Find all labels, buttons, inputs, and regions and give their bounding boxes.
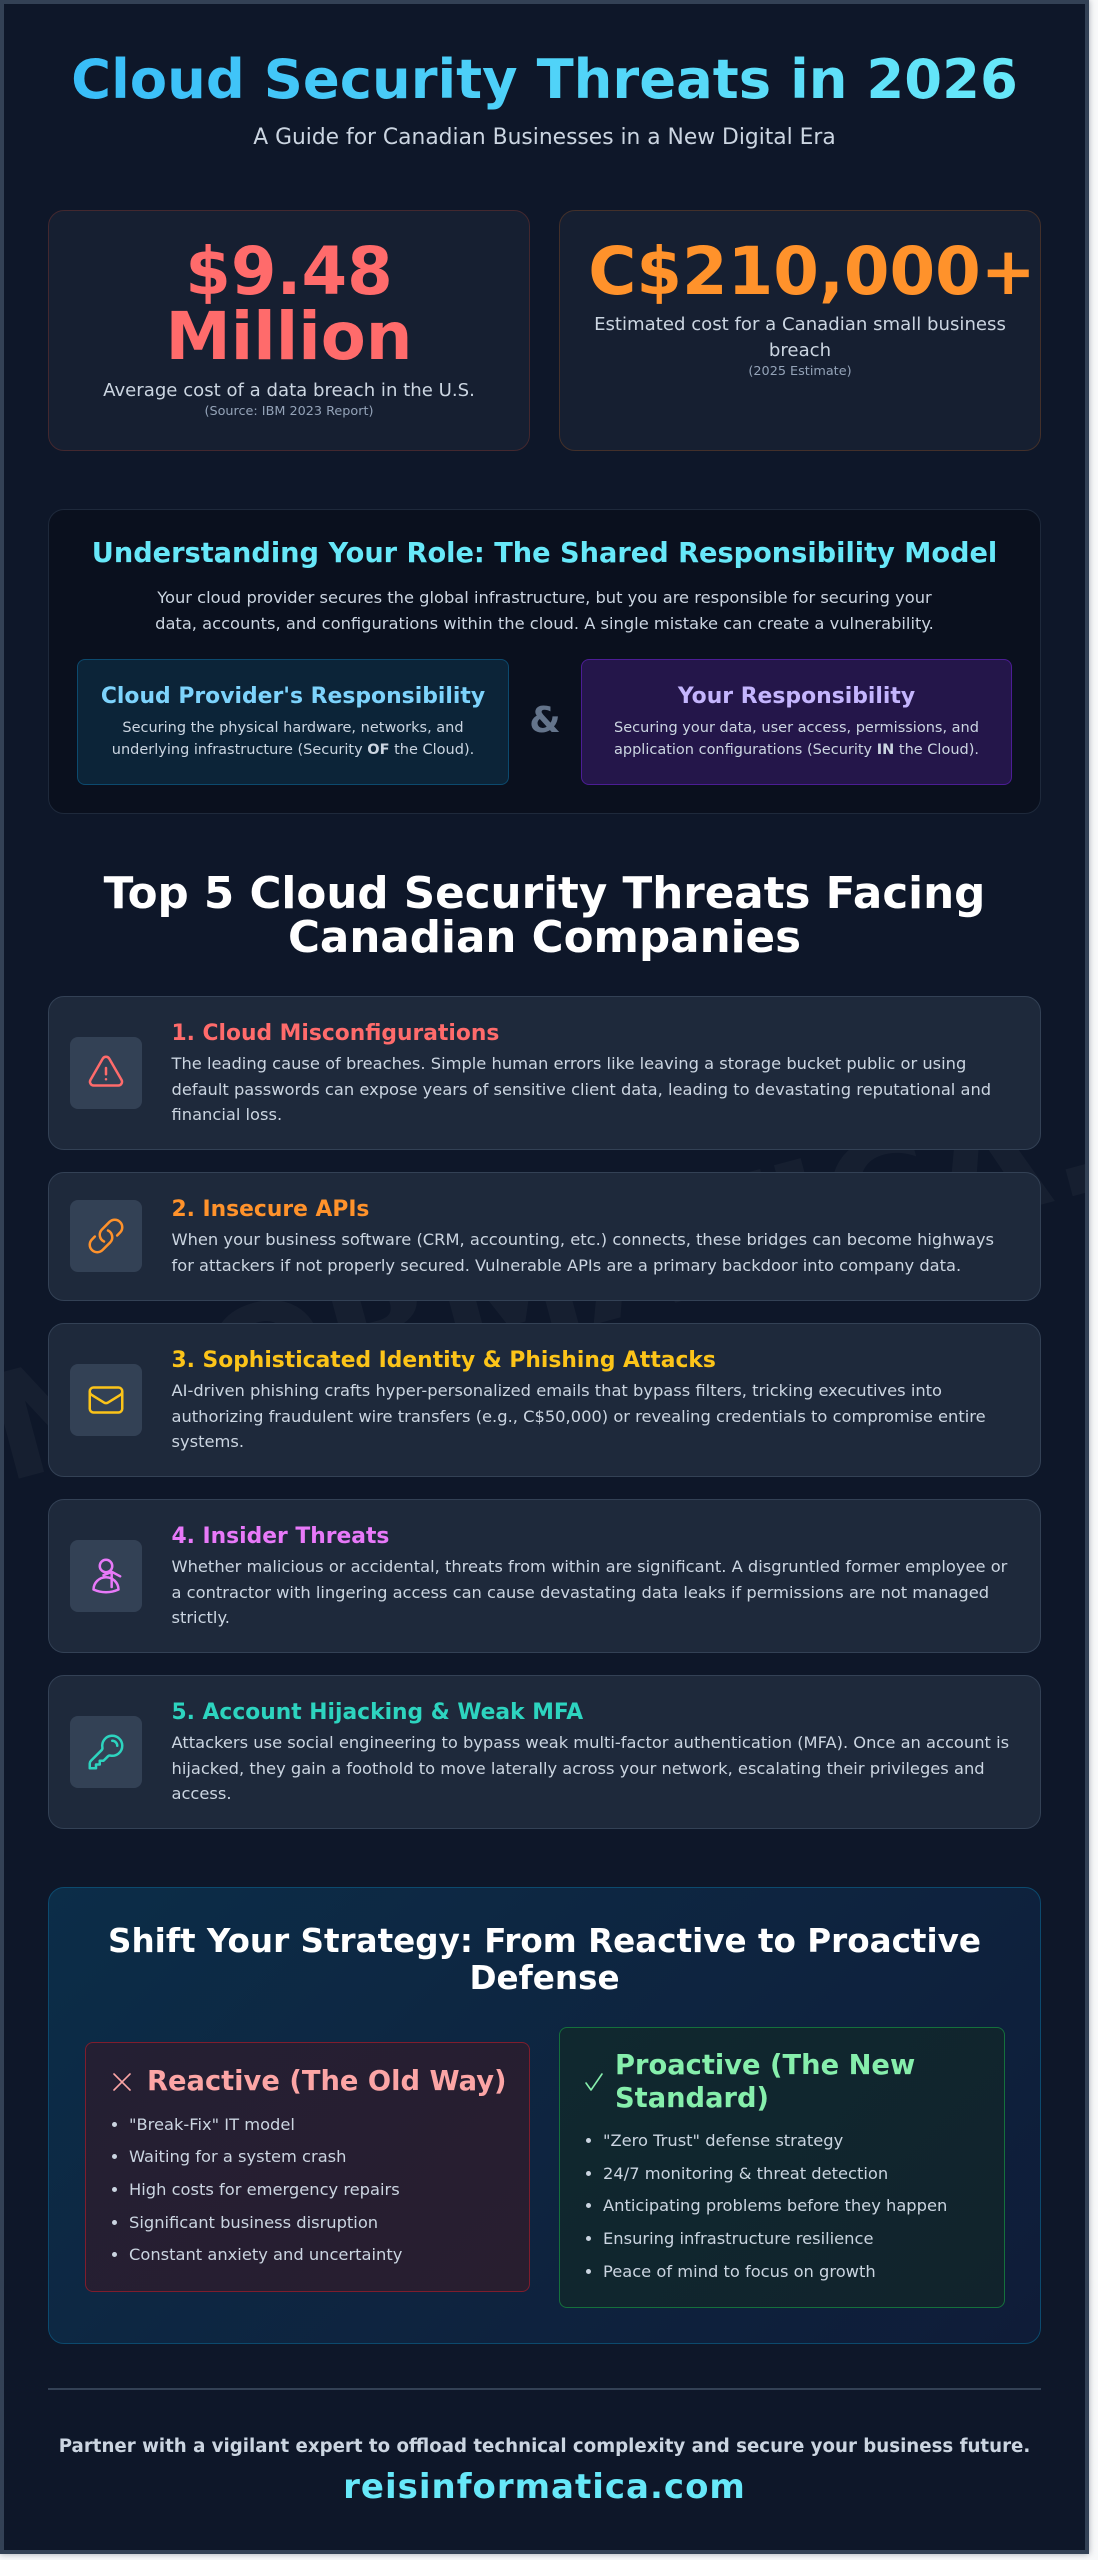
card: reactive <box>85 2042 530 2292</box>
section heading: top 5 threats: Canadian Companies <box>288 913 801 963</box>
threat text: financial loss. <box>172 1105 282 1124</box>
threat text: strictly. <box>172 1608 230 1627</box>
icon: chain link <box>70 1200 142 1272</box>
threat text: Whether malicious or accidental, threats from within are significant. A disgruntled former employee or <box>172 1557 1007 1576</box>
proactive heading: Standard) <box>615 2083 769 2114</box>
card: cloud provider responsibility <box>77 659 509 785</box>
reactive list: Waiting for a system crash <box>129 2147 346 2166</box>
reactive list: Constant anxiety and uncertainty <box>129 2245 402 2264</box>
stat value: $9.48 Million: Million <box>166 299 412 375</box>
proactive heading: Proactive (The New <box>615 2050 915 2081</box>
threat text <box>172 1557 1008 1627</box>
proactive list: 24/7 monitoring & threat detection <box>603 2164 888 2183</box>
ampersand: & <box>529 700 561 741</box>
threat text: access. <box>172 1784 232 1803</box>
threat heading: 5. Account Hijacking & Weak MFA <box>172 1700 583 1725</box>
icon: warning triangle <box>70 1037 142 1109</box>
reactive heading: Reactive (The Old Way) <box>147 2066 506 2097</box>
proactive list: Anticipating problems before they happen <box>603 2196 947 2215</box>
panel: US breach cost stat <box>48 210 530 451</box>
card text <box>614 720 979 758</box>
panel: threat 2 <box>48 1172 1041 1301</box>
threat text <box>172 1381 986 1451</box>
stat description <box>594 314 1006 361</box>
card: proactive <box>559 2027 1005 2308</box>
stat source: (Source: IBM 2023 Report) <box>204 404 374 419</box>
icon: cross <box>113 2073 131 2091</box>
threat text: a contractor with lingering access can cause devastating data leaks if permissions are not managed <box>172 1583 989 1602</box>
threat text: for attackers if not properly secured. Vulnerable APIs are a primary backdoor into company data. <box>172 1256 961 1275</box>
proactive list: Ensuring infrastructure resilience <box>603 2229 873 2248</box>
threat text: The leading cause of breaches. Simple human errors like leaving a storage bucket public or using <box>172 1054 966 1073</box>
threat heading: 1. Cloud Misconfigurations <box>172 1021 499 1046</box>
stat value: C$210,000+: C$210,000+ <box>588 234 1036 310</box>
threat text: AI-driven phishing crafts hyper-personalized emails that bypass filters, tricking executives into <box>172 1381 942 1400</box>
section heading: top 5 threats: Top 5 Cloud Security Threats Facing <box>104 869 985 919</box>
strategy heading: Shift Your Strategy: From Reactive to Proactive <box>108 1922 981 1960</box>
proactive list: Peace of mind to focus on growth <box>603 2262 876 2281</box>
title: Cloud Security Threats in 2026 <box>71 48 1018 111</box>
threat text: systems. <box>172 1432 244 1451</box>
section heading: top 5 threats <box>104 869 985 963</box>
stat value: $9.48 Million: $9.48 <box>185 234 393 310</box>
reactive list: "Break-Fix" IT model <box>129 2114 295 2134</box>
panel: threat 1 <box>48 996 1041 1150</box>
card text <box>112 720 474 758</box>
intro text <box>155 588 934 633</box>
reactive list: High costs for emergency repairs <box>129 2180 400 2199</box>
strategy heading <box>108 1922 981 1997</box>
heading: Understanding Your Role: The Shared Responsibility Model <box>92 538 997 569</box>
intro text: Your cloud provider secures the global infrastructure, but you are responsible for securing your <box>157 588 932 607</box>
card text: application configurations (Security IN the Cloud). <box>614 742 979 758</box>
proactive list: "Zero Trust" defense strategy <box>603 2131 843 2150</box>
card text: Securing the physical hardware, networks, and <box>122 720 464 736</box>
threat heading: 3. Sophisticated Identity & Phishing Attacks <box>172 1348 716 1373</box>
stat value: $9.48 Million <box>166 234 412 375</box>
stat source: (2025 Estimate) <box>748 364 852 379</box>
threat heading: 4. Insider Threats <box>172 1524 389 1549</box>
threat text <box>172 1733 1009 1803</box>
reactive list <box>112 2114 402 2264</box>
intro text: data, accounts, and configurations within the cloud. A single mistake can create a vulnerability. <box>155 614 934 633</box>
panel: strategy shift <box>48 1887 1041 2344</box>
stat description: Average cost of a data breach in the U.S. <box>103 380 475 401</box>
panel: Canadian breach cost stat <box>559 210 1041 451</box>
reactive list: Significant business disruption <box>129 2213 378 2232</box>
threat text: authorizing fraudulent wire transfers (e.g., C$50,000) or revealing credentials to compromise entire <box>172 1407 986 1426</box>
card heading: Cloud Provider's Responsibility <box>101 684 485 709</box>
proactive heading <box>615 2050 915 2114</box>
proactive list <box>586 2131 947 2281</box>
stat description: Estimated cost for a Canadian small business <box>594 314 1006 335</box>
panel: threat 5 <box>48 1675 1041 1829</box>
icon: insider person <box>70 1540 142 1612</box>
threat text: hijacked, they gain a foothold to move laterally across your network, escalating their privileges and <box>172 1759 985 1778</box>
icon: key <box>70 1716 142 1788</box>
threat text <box>172 1230 994 1275</box>
subtitle: A Guide for Canadian Businesses in a New Digital Era <box>253 125 836 150</box>
threat text: When your business software (CRM, accounting, etc.) connects, these bridges can become highways <box>172 1230 994 1249</box>
threat text: Attackers use social engineering to bypass weak multi-factor authentication (MFA). Once an account is <box>172 1733 1009 1752</box>
threat text: default passwords can expose years of sensitive client data, leading to devastating reputational and <box>172 1080 991 1099</box>
card heading: Your Responsibility <box>678 684 915 709</box>
threat text <box>171 1054 991 1124</box>
stat description: breach <box>769 340 831 361</box>
card text: Securing your data, user access, permissions, and <box>614 720 979 736</box>
icon: envelope <box>70 1364 142 1436</box>
panel: threat 3 <box>48 1323 1041 1477</box>
card text: underlying infrastructure (Security OF the Cloud). <box>112 742 474 758</box>
card: your responsibility <box>581 659 1012 785</box>
threat heading: 2. Insecure APIs <box>172 1197 369 1222</box>
footer call to action: Partner with a vigilant expert to offload technical complexity and secure your business future. <box>59 2436 1030 2457</box>
panel: shared responsibility model <box>48 509 1041 814</box>
footer website: reisinformatica.com <box>343 2467 746 2507</box>
strategy heading: Defense <box>469 1959 620 1997</box>
panel: threat 4 <box>48 1499 1041 1653</box>
footer divider <box>48 2388 1041 2390</box>
icon: check mark <box>585 2073 603 2091</box>
